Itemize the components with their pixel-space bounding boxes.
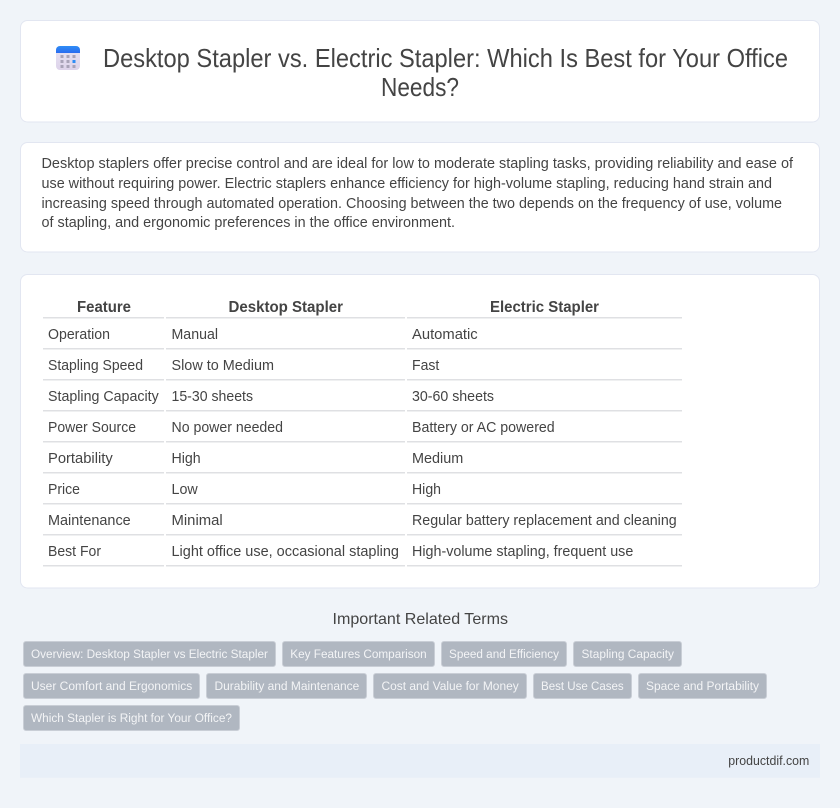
description text: Desktop staplers offer precise control and are ideal for low to moderate stapling tasks, providing reliability and ease of [42,156,794,172]
related terms tags: Overview: Desktop Stapler vs Electric Stapler [31,647,268,661]
row: best for: Light office use, occasional stapling [172,544,399,560]
row: stapling speed [43,358,682,380]
row: stapling capacity: 30-60 sheets [412,389,494,405]
row: stapling speed: Stapling Speed [48,358,143,374]
panel: title card [20,20,820,122]
table header: Feature [77,299,131,316]
description text: of stapling, and ergonomic preferences in the office environment. [42,215,455,231]
row: portability [43,451,682,474]
row: operation: Automatic [412,327,478,343]
title: Desktop Stapler vs. Electric Stapler: Which Is Best for Your Office [103,45,788,73]
row: stapling speed: Fast [412,358,439,374]
row: maintenance: Minimal [172,513,223,529]
related terms tags: Which Stapler is Right for Your Office? [31,711,232,725]
row: operation: Operation [48,327,110,343]
related terms tags: User Comfort and Ergonomics [31,679,192,693]
panel: comparison table [20,274,820,588]
related terms tags: Speed and Efficiency [449,647,560,661]
footer bar [20,744,820,778]
table header: Desktop Stapler [228,299,343,316]
description text: increasing speed through automated operation. Choosing between the two depends on the frequency of use, volume [42,196,782,212]
row: power source: Battery or AC powered [412,420,555,436]
related terms tags: Durability and Maintenance [214,679,359,693]
row: best for: Best For [48,544,101,560]
panel: description [20,142,820,252]
related terms tags: Space and Portability [646,679,760,693]
row: maintenance [43,513,682,536]
related terms tags [24,642,766,730]
row: stapling capacity: Stapling Capacity [48,389,159,405]
row: power source: No power needed [172,420,283,436]
title: Needs? [381,74,459,102]
description text [42,156,794,231]
row: price: Low [172,482,198,498]
row: portability: Portability [48,451,113,467]
title [103,45,788,102]
row: best for: High-volume stapling, frequent use [412,544,633,560]
row: stapling capacity: 15-30 sheets [172,389,253,405]
row: power source [43,420,682,442]
row: operation [43,327,682,350]
row: portability: Medium [412,451,463,467]
row: price: Price [48,482,80,498]
table header: Electric Stapler [490,299,599,316]
row: stapling capacity [43,389,682,412]
row: operation: Manual [172,327,218,343]
row: price: High [412,482,441,498]
related terms tags: Cost and Value for Money [382,679,520,693]
row: maintenance: Maintenance [48,513,131,529]
row: best for [43,544,682,566]
row: power source: Power Source [48,420,136,436]
row: maintenance: Regular battery replacement and cleaning [412,513,677,529]
description text: use without requiring power. Electric staplers enhance efficiency for high-volume stapling, reducing hand strain and [42,176,772,192]
related terms tags: Key Features Comparison [290,647,427,661]
related terms tags: Stapling Capacity [582,647,675,661]
heading: related terms: Important Related Terms [332,611,508,628]
row: portability: High [172,451,201,467]
row: price [43,482,682,504]
row: stapling speed: Slow to Medium [172,358,274,374]
table header [43,299,682,318]
icon: calendar [56,46,80,70]
related terms tags: Best Use Cases [541,679,624,693]
footer bar: productdif.com [728,754,809,768]
